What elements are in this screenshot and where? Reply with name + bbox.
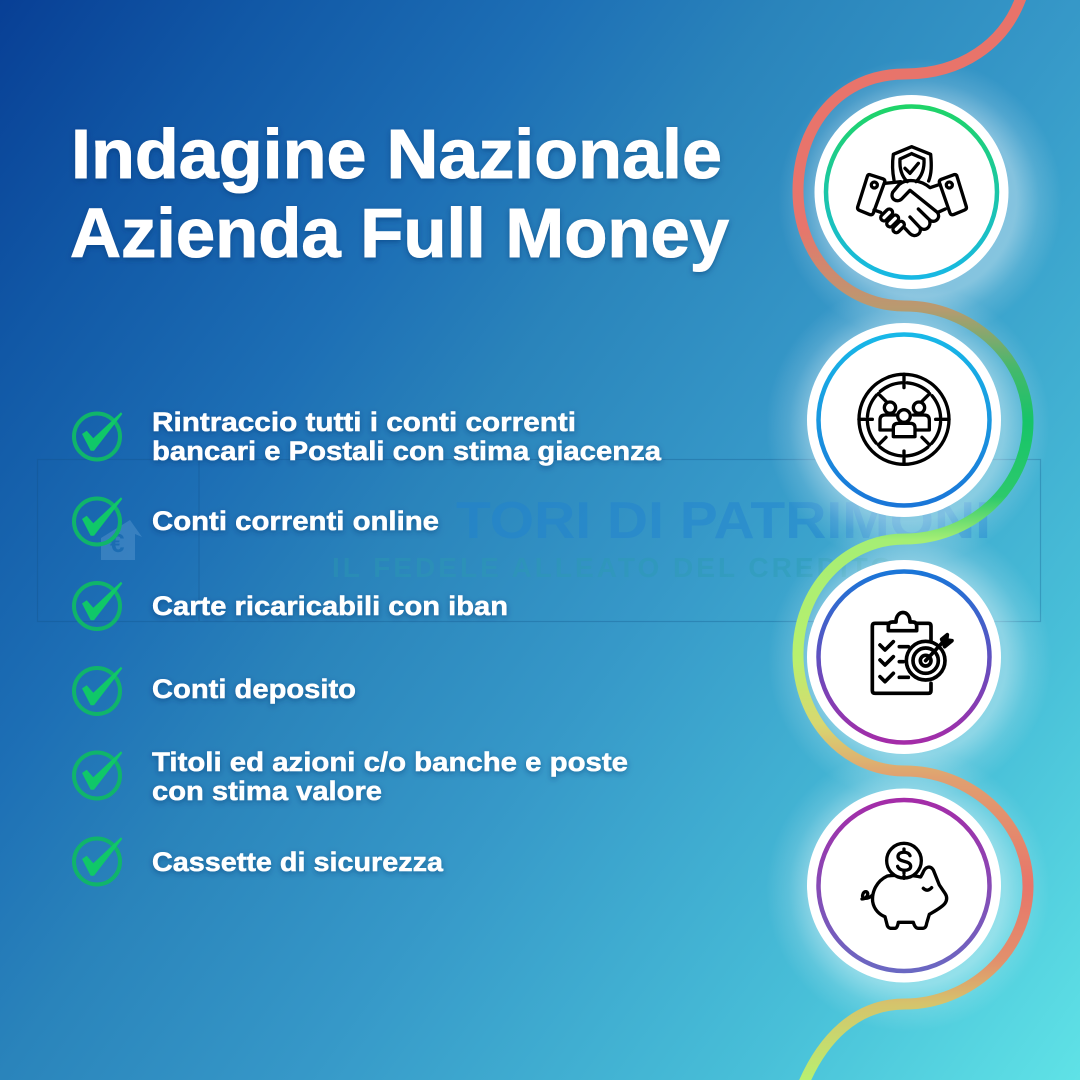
item text — [152, 407, 662, 466]
watermark house icon — [101, 520, 142, 560]
icon: people in crosshair — [859, 374, 949, 464]
check icon — [74, 582, 122, 629]
item text: Cassette di sicurezza — [152, 847, 444, 877]
item text: con stima valore — [152, 776, 382, 806]
title line 2: Azienda Full Money — [70, 194, 729, 272]
item text: Conti correnti online — [152, 506, 439, 536]
item: cassette di sicurezza — [74, 837, 444, 884]
icon: piggy bank with coin — [862, 843, 947, 928]
icon: clipboard and target — [872, 612, 952, 693]
item text: bancari e Postali con stima giacenza — [152, 436, 662, 466]
check icon — [74, 667, 122, 714]
item: conti deposito — [74, 667, 356, 714]
item text: Titoli ed azioni c/o banche e poste — [152, 747, 628, 777]
item: carte ricaricabili — [74, 582, 508, 629]
item text: Carte ricaricabili con iban — [152, 591, 508, 621]
badge: piggy bank — [807, 788, 1001, 982]
item: conti correnti bancari — [74, 407, 662, 466]
watermark frame — [38, 459, 1040, 622]
check icon — [74, 751, 122, 798]
check icon — [74, 837, 122, 884]
circle glows — [766, 58, 1062, 1032]
badge: target group — [807, 323, 1001, 517]
check icon — [74, 412, 122, 460]
badge: handshake — [814, 95, 1008, 289]
watermark logo — [38, 459, 1040, 622]
item text: Rintraccio tutti i conti correnti — [152, 407, 576, 437]
item: conti online — [74, 497, 439, 544]
curved ribbon — [798, 0, 1028, 1080]
item text — [152, 747, 628, 806]
item text: Conti deposito — [152, 674, 356, 704]
item: titoli ed azioni — [74, 747, 628, 806]
checklist — [74, 407, 662, 884]
title line 1: Indagine Nazionale — [71, 115, 722, 193]
watermark house icon: € — [110, 528, 124, 558]
check icon — [74, 497, 122, 544]
watermark name: TORI DI PATRIMONI — [456, 492, 991, 550]
badge: checklist target — [807, 560, 1001, 754]
title — [70, 115, 729, 272]
icon: handshake with shield — [858, 147, 966, 236]
watermark tagline: IL FEDELE ALLEATO DEL CREDITO — [332, 552, 892, 583]
